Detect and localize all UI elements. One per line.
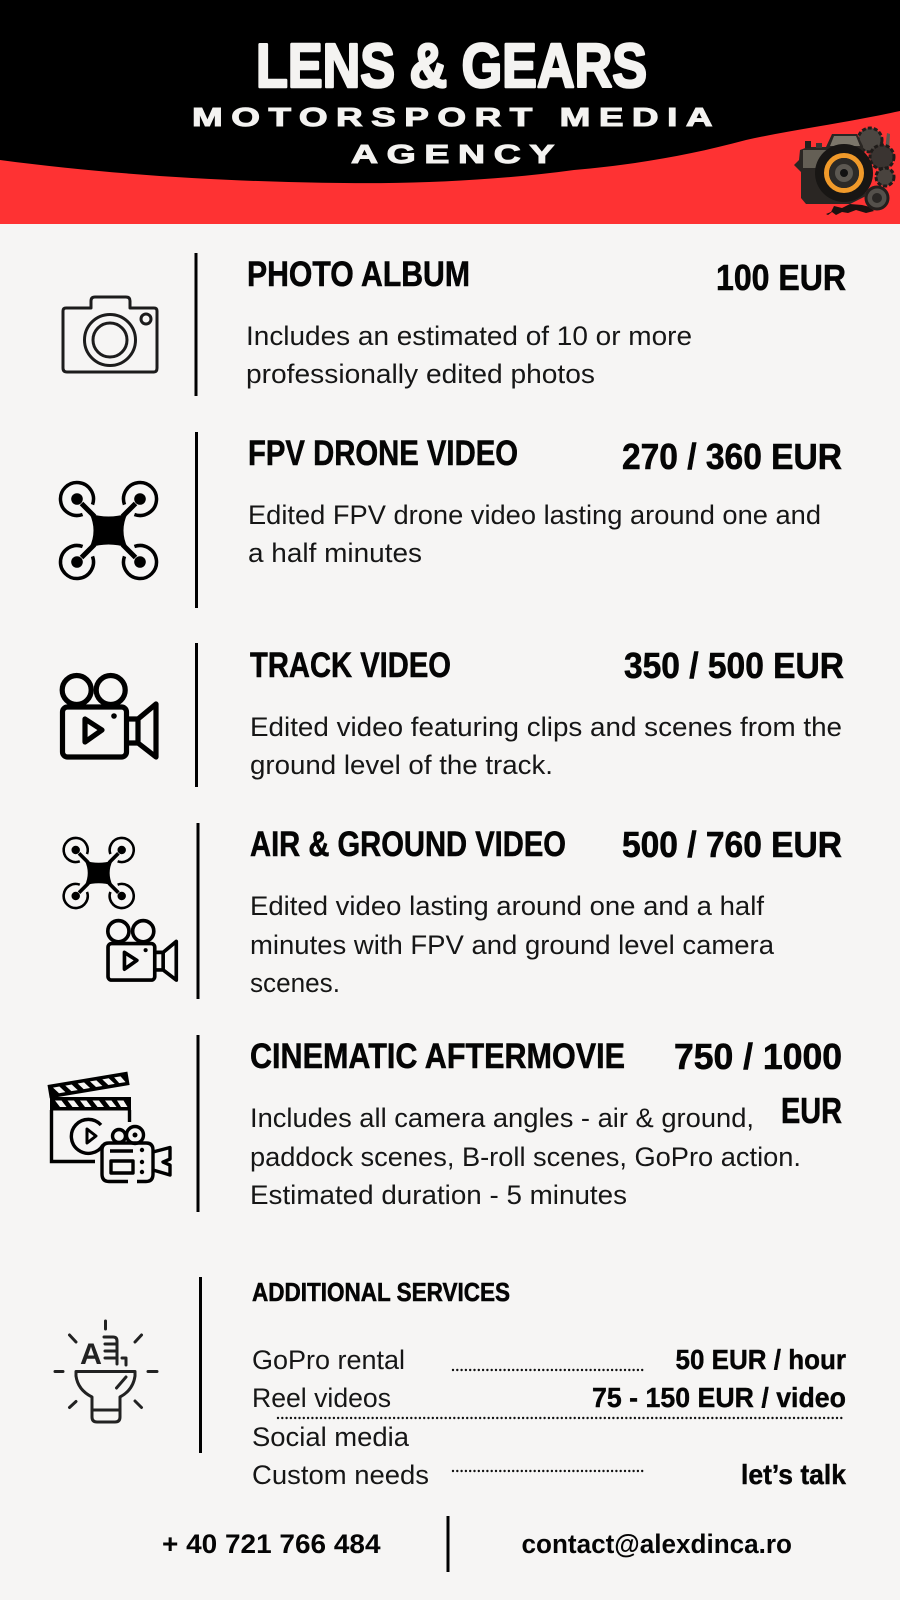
icon: photo camera bbox=[63, 297, 157, 372]
panel: air and ground video: AIR & GROUND VIDEO bbox=[250, 825, 566, 864]
panel: additional services: 50 EUR / hour bbox=[676, 1344, 846, 1375]
panel: additional services: Social media bbox=[252, 1422, 410, 1452]
panel: track video: ground level of the track. bbox=[250, 750, 553, 780]
subtitle bbox=[192, 102, 721, 169]
icon: small drone bbox=[64, 838, 134, 908]
icon: movie camera bbox=[62, 676, 156, 757]
panel: photo album: professionally edited photos bbox=[246, 359, 595, 389]
icon: small movie camera bbox=[108, 921, 176, 980]
subtitle: MOTORSPORT MEDIA bbox=[192, 102, 721, 132]
panel: track video bbox=[62, 643, 844, 787]
icon: idea light bulb bbox=[55, 1321, 157, 1422]
panel: FPV drone video: Edited FPV drone video lasting around one and bbox=[248, 500, 821, 530]
panel: air and ground video: minutes with FPV and ground level camera bbox=[250, 930, 774, 960]
panel: photo album: 100 EUR bbox=[716, 257, 846, 298]
panel: cinematic aftermovie: CINEMATIC AFTERMOVIE bbox=[250, 1037, 625, 1076]
panel: additional services: Custom needs bbox=[252, 1460, 429, 1490]
panel: additional services: let’s talk bbox=[741, 1459, 846, 1490]
panel: additional services: ADDITIONAL SERVICES bbox=[252, 1277, 510, 1307]
panel: track video: TRACK VIDEO bbox=[250, 646, 451, 685]
icon: idea light bulb: A bbox=[80, 1338, 102, 1371]
panel: additional services: 75 - 150 EUR / video bbox=[592, 1382, 846, 1413]
panel: FPV drone video: a half minutes bbox=[248, 538, 422, 568]
panel: additional services: GoPro rental bbox=[252, 1345, 405, 1375]
panel: air and ground video: Edited video lasting around one and a half bbox=[250, 891, 765, 921]
panel: photo album: PHOTO ALBUM bbox=[247, 255, 470, 294]
panel: cinematic aftermovie: Includes all camera angles - air & ground, bbox=[250, 1103, 754, 1133]
panel: cinematic aftermovie: paddock scenes, B-roll scenes, GoPro action. bbox=[250, 1142, 801, 1172]
panel: photo album bbox=[63, 253, 846, 396]
footer contact bbox=[162, 1516, 792, 1572]
panel: cinematic aftermovie: 750 / 1000 bbox=[674, 1036, 842, 1077]
panel: air and ground video bbox=[64, 823, 842, 999]
icon: camera with gears illustration bbox=[794, 128, 894, 215]
panel: track video: 350 / 500 EUR bbox=[624, 645, 844, 686]
footer contact: contact@alexdinca.ro bbox=[522, 1529, 792, 1559]
footer contact: + 40 721 766 484 bbox=[162, 1529, 380, 1559]
panel: additional services: Reel videos bbox=[252, 1383, 391, 1413]
icon: drone bbox=[60, 482, 157, 579]
panel: air and ground video: scenes. bbox=[250, 968, 340, 998]
panel: FPV drone video: 270 / 360 EUR bbox=[622, 436, 842, 477]
panel: photo album: Includes an estimated of 10 or more bbox=[246, 321, 692, 351]
panel: track video: Edited video featuring clips and scenes from the bbox=[250, 712, 842, 742]
title: LENS & GEARS bbox=[256, 32, 647, 101]
header banner bbox=[0, 0, 900, 224]
panel: FPV drone video bbox=[60, 432, 842, 608]
panel: cinematic aftermovie: Estimated duration - 5 minutes bbox=[250, 1180, 627, 1210]
panel: FPV drone video: FPV DRONE VIDEO bbox=[248, 434, 518, 473]
panel: cinematic aftermovie bbox=[48, 1035, 842, 1212]
panel: air and ground video: 500 / 760 EUR bbox=[622, 824, 842, 865]
panel: cinematic aftermovie: EUR bbox=[781, 1090, 842, 1131]
icon: clapperboard and camera bbox=[48, 1072, 170, 1182]
panel: additional services bbox=[55, 1277, 846, 1490]
subtitle: AGENCY bbox=[351, 139, 563, 169]
